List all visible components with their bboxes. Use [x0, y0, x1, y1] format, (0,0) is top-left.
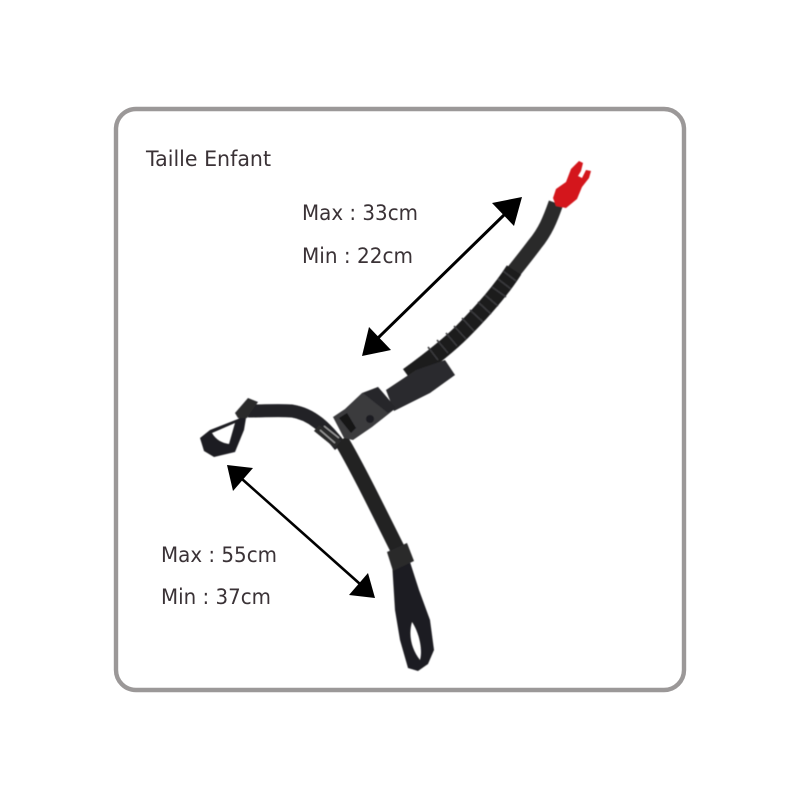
arrow: upper double arrow — [362, 197, 522, 356]
left strap — [248, 411, 340, 446]
left slider — [235, 398, 258, 418]
text block: upper measurements — [302, 201, 418, 268]
text block: upper measurements: Max : 33cm — [302, 201, 418, 225]
upper strap — [510, 203, 556, 276]
elastic pleats — [428, 271, 516, 360]
fabric sleeve — [386, 360, 455, 411]
illustration: child leash strap — [200, 161, 591, 671]
main strap — [341, 440, 399, 552]
text block: lower measurements: Max : 55cm — [161, 543, 277, 567]
buckle — [333, 387, 396, 440]
lower loop — [392, 562, 434, 671]
text block: upper measurements: Min : 22cm — [302, 244, 413, 268]
red clip — [553, 161, 591, 208]
left loop — [200, 412, 247, 457]
lower slider — [387, 543, 414, 571]
text block: lower measurements: Min : 37cm — [161, 585, 271, 609]
panel: rounded frame — [116, 109, 684, 690]
text block: lower measurements — [161, 543, 277, 609]
heading: size category: Taille Enfant — [145, 147, 271, 171]
arrow: lower double arrow — [227, 465, 375, 598]
elastic cord — [408, 270, 514, 376]
tri-glide bars — [314, 425, 341, 448]
